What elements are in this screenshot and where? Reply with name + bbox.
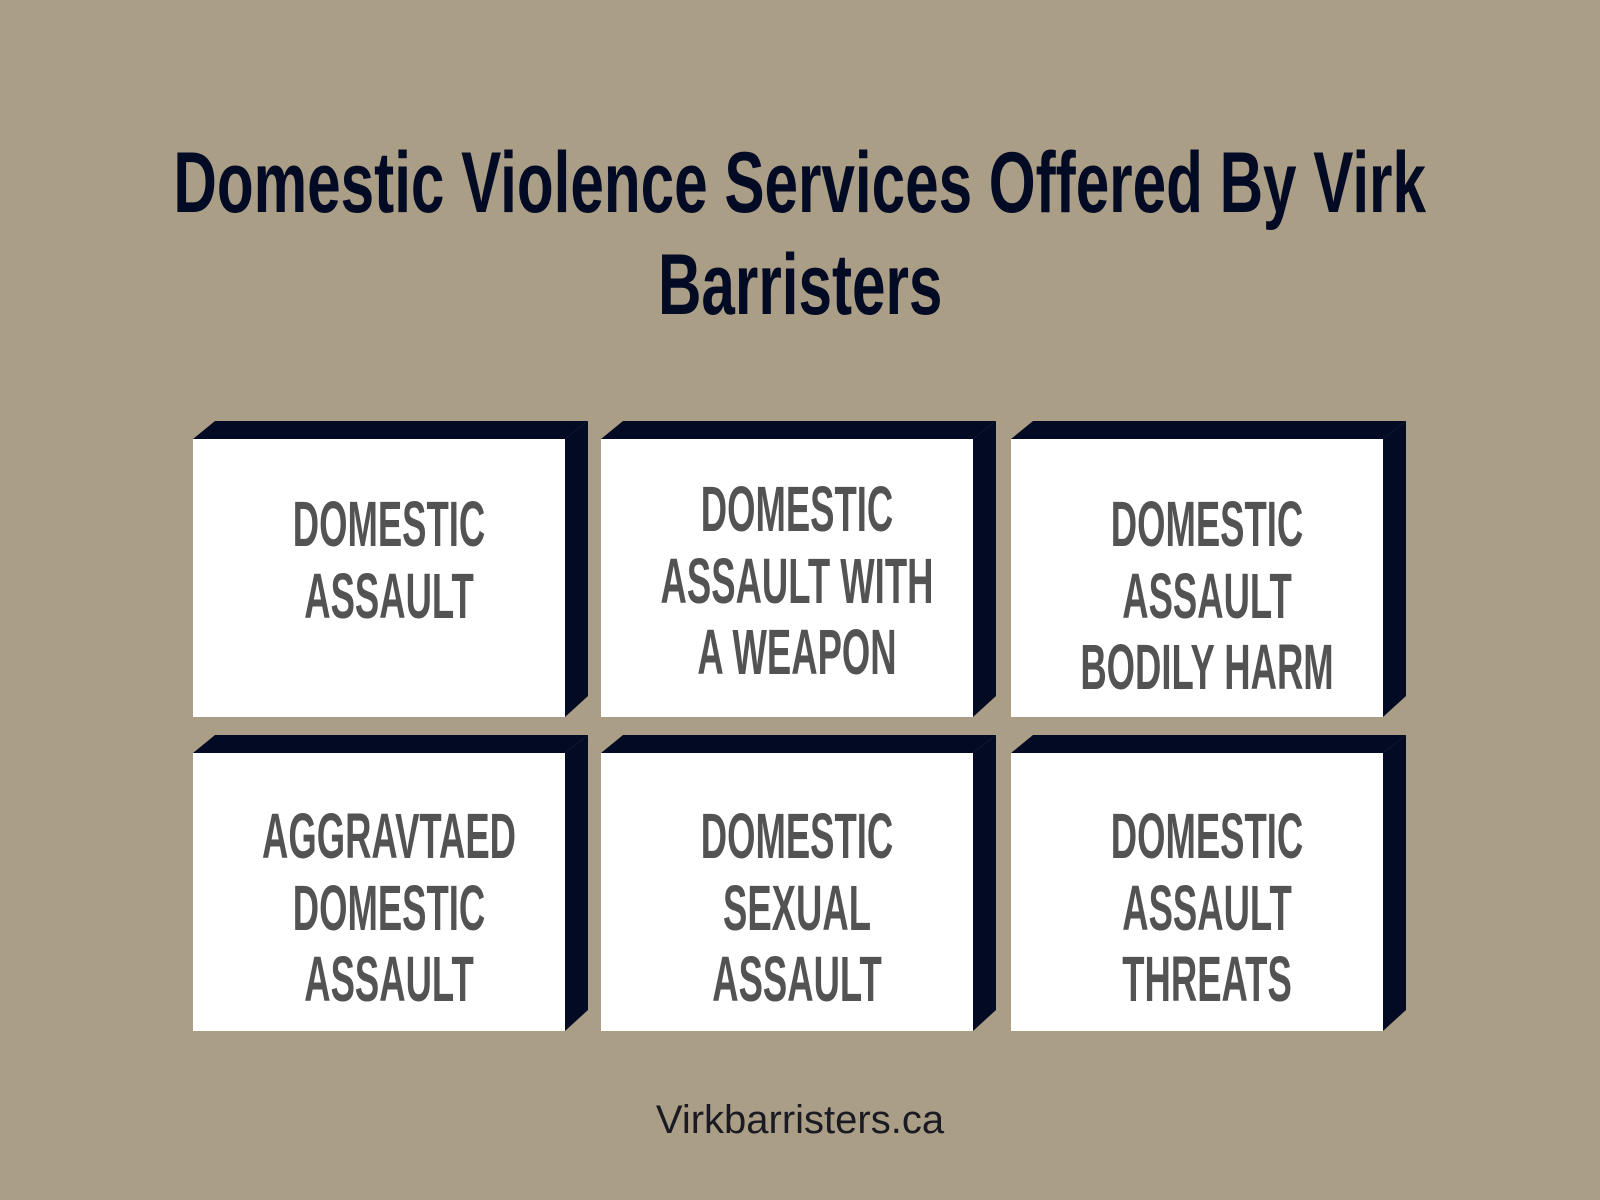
card: aggravated domestic assault: ASSAULT <box>304 943 474 1015</box>
title: Barristers <box>658 237 942 333</box>
card: domestic assault with a weapon <box>601 421 996 717</box>
card: domestic sexual assault: ASSAULT <box>712 943 882 1015</box>
card: aggravated domestic assault: AGGRAVTAED <box>262 800 516 872</box>
card: aggravated domestic assault: DOMESTIC <box>293 872 485 944</box>
card: domestic assault <box>193 421 588 717</box>
card: aggravated domestic assault <box>193 735 588 1031</box>
card: domestic assault bodily harm: DOMESTIC <box>1111 488 1303 560</box>
card: domestic assault: ASSAULT <box>304 560 474 632</box>
card: domestic assault threats: DOMESTIC <box>1111 800 1303 872</box>
card: domestic assault with a weapon: ASSAULT WITH <box>661 544 933 616</box>
card: domestic assault bodily harm: ASSAULT <box>1122 560 1292 632</box>
card: domestic assault with a weapon: DOMESTIC <box>701 473 893 545</box>
title: Domestic Violence Services Offered By Virk <box>174 135 1426 231</box>
card: domestic sexual assault <box>601 735 996 1031</box>
footer url: Virkbarristers.ca <box>656 1098 944 1142</box>
card: domestic assault: DOMESTIC <box>293 488 485 560</box>
card: domestic assault bodily harm <box>1011 421 1406 717</box>
card: domestic assault bodily harm: BODILY HARM <box>1080 631 1334 703</box>
title <box>174 135 1426 333</box>
card: domestic assault threats: THREATS <box>1122 943 1292 1015</box>
card: domestic sexual assault: SEXUAL <box>723 872 871 944</box>
card: domestic sexual assault: DOMESTIC <box>701 800 893 872</box>
card: domestic assault threats: ASSAULT <box>1122 872 1292 944</box>
card: domestic assault with a weapon: A WEAPON <box>697 616 897 688</box>
card: domestic assault threats <box>1011 735 1406 1031</box>
